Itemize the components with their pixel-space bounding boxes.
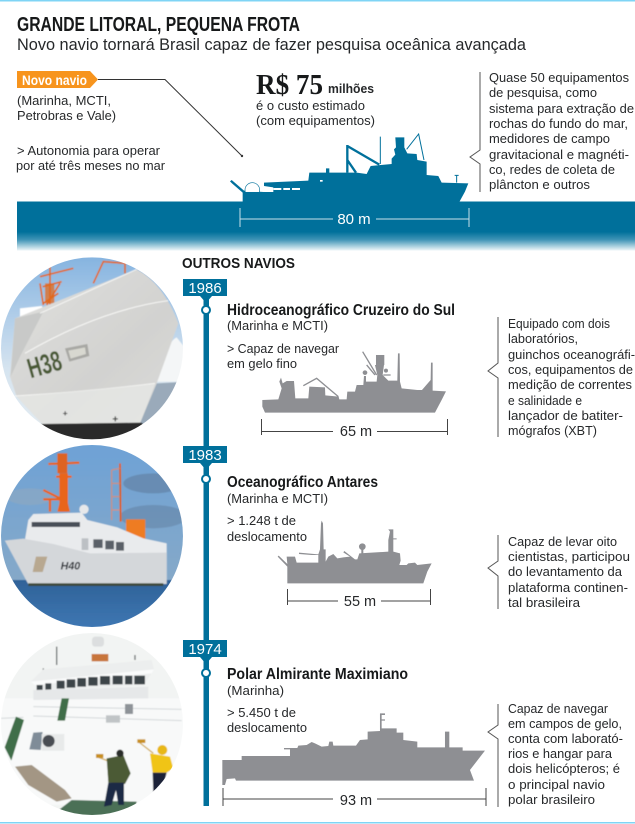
photo: H38 hull: H38 <box>24 345 66 385</box>
callout: equipment: Quase 50 equipamentos <box>489 70 629 85</box>
title: GRANDE LITORAL, PEQUENA FROTA <box>17 14 300 36</box>
callout: Polar Almirante Maximiano: o principal navio <box>508 777 605 792</box>
callout: Cruzeiro do Sul <box>488 316 635 438</box>
callout: Polar Almirante Maximiano: Capaz de navegar <box>508 701 609 716</box>
text block: Cruzeiro do Sul: Hidroceanográfico Cruzeiro do Sul <box>227 302 455 319</box>
heading: outros navios: OUTROS NAVIOS <box>182 255 295 272</box>
badge: Novo navio: Novo navio <box>22 72 87 88</box>
text block: Antares: deslocamento <box>227 529 307 544</box>
dimension: 80 m <box>240 208 469 228</box>
callout: Polar Almirante Maximiano: dois helicópteros; é <box>508 761 620 776</box>
dimension: 93 m <box>223 788 486 809</box>
callout: Antares: Capaz de levar oito <box>508 534 617 549</box>
callout: Antares: plataforma continen- <box>508 580 628 595</box>
photo: Polar ship deck <box>0 630 187 820</box>
arrow: leader line to ship <box>98 80 243 157</box>
text block: Cruzeiro do Sul: em gelo fino <box>227 356 297 371</box>
text: partners: Petrobras e Vale) <box>17 108 116 123</box>
dimension: 93 m: 93 m <box>340 793 372 809</box>
callout: Cruzeiro do Sul: medição de correntes <box>508 377 632 392</box>
cost callout: R$ 75 <box>256 69 323 101</box>
dimension: 80 m: 80 m <box>337 211 371 228</box>
text block: Cruzeiro do Sul <box>227 302 455 371</box>
text block: Antares <box>227 474 378 544</box>
photo: H38 hull: + <box>63 408 68 418</box>
callout: equipment: co, redes de coleta de <box>489 162 615 177</box>
text block: Polar Almirante Maximiano: > 5.450 t de <box>227 705 296 720</box>
icon: new ship silhouette <box>230 134 468 202</box>
top rule <box>0 0 635 2</box>
cost callout: é o custo estimado <box>256 98 365 113</box>
tag: 1986 <box>183 279 227 314</box>
text block: Antares: Oceanográfico Antares <box>227 474 378 491</box>
callout: Cruzeiro do Sul: guinchos oceanográfi- <box>508 347 635 362</box>
text block: Cruzeiro do Sul: > Capaz de navegar <box>227 341 340 356</box>
subtitle: Novo navio tornará Brasil capaz de fazer pesquisa oceânica avançada <box>17 35 527 54</box>
text block: Polar Almirante Maximiano: Polar Almirante Maximiano <box>227 666 408 683</box>
callout: Polar Almirante Maximiano: conta com laborató- <box>508 731 623 746</box>
timeline <box>183 279 227 806</box>
photo: H40 ship at sea <box>0 443 187 630</box>
callout: equipment: plâncton e outros <box>489 177 591 192</box>
callout: equipment: medidores de campo <box>489 131 610 146</box>
callout: Cruzeiro do Sul: mógrafos (XBT) <box>508 423 597 438</box>
text: partners <box>17 93 116 123</box>
callout: Polar Almirante Maximiano <box>488 701 623 807</box>
dimension: 55 m: 55 m <box>344 594 376 610</box>
text block: Antares: (Marinha e MCTI) <box>227 491 328 506</box>
text: autonomy: > Autonomia para operar <box>17 143 161 158</box>
callout: Cruzeiro do Sul: lançador de batiter- <box>508 408 623 423</box>
callout: Cruzeiro do Sul: e salinidade e <box>508 393 582 408</box>
callout: Antares: cientistas, participou <box>508 549 630 564</box>
text: autonomy: por até três meses no mar <box>16 158 166 173</box>
callout: Polar Almirante Maximiano: polar brasileiro <box>508 792 595 807</box>
callout: Cruzeiro do Sul: cos, equipamentos de <box>508 362 633 377</box>
dimension: 55 m <box>288 589 430 610</box>
text block: Polar Almirante Maximiano <box>227 666 408 735</box>
bottom rule <box>0 822 635 824</box>
callout: Cruzeiro do Sul: Equipado com dois <box>508 316 610 331</box>
callout: equipment: rochas do fundo do mar, <box>489 116 628 131</box>
callout: equipment <box>470 70 634 192</box>
icon: Polar Almirante Maximiano silhouette <box>222 713 485 785</box>
photo: H40 ship at sea: H40 <box>61 560 80 572</box>
photo: H38 hull: + <box>112 415 118 426</box>
dimension: 65 m <box>262 419 448 440</box>
callout: Polar Almirante Maximiano: em campos de gelo, <box>508 716 622 731</box>
tag: 1974 <box>183 640 227 677</box>
callout: Cruzeiro do Sul: laboratórios, <box>508 331 578 346</box>
tag: 1983: 1983 <box>188 447 222 464</box>
text block: Polar Almirante Maximiano: (Marinha) <box>227 683 284 698</box>
callout: Polar Almirante Maximiano: rios e hangar para <box>508 746 613 761</box>
text block: Antares: > 1.248 t de <box>227 513 296 528</box>
cost callout <box>256 69 375 128</box>
callout: Antares <box>488 534 630 610</box>
tag: 1974: 1974 <box>188 641 222 658</box>
photo: H38 hull <box>0 257 187 443</box>
icon: Antares silhouette <box>278 521 432 583</box>
callout: Antares: do levantamento da <box>508 564 623 579</box>
icon: Cruzeiro do Sul silhouette <box>262 352 446 413</box>
tag: 1983 <box>183 446 227 483</box>
callout: equipment: gravitacional e magnéti- <box>489 147 629 162</box>
text: autonomy <box>16 143 166 173</box>
callout: equipment: sistema para extração de <box>489 101 634 116</box>
dimension: 65 m: 65 m <box>340 424 372 440</box>
callout: equipment: de pesquisa, como <box>489 85 597 100</box>
cost callout: milhões <box>328 81 374 96</box>
text block: Polar Almirante Maximiano: deslocamento <box>227 720 307 735</box>
panel: new ship info <box>16 71 243 173</box>
cost callout: (com equipamentos) <box>256 113 375 128</box>
sea band <box>17 202 635 250</box>
text: partners: (Marinha, MCTI, <box>17 93 111 108</box>
callout: Antares: tal brasileira <box>508 595 581 610</box>
tag: 1986: 1986 <box>188 280 222 297</box>
text block: Cruzeiro do Sul: (Marinha e MCTI) <box>227 318 328 333</box>
